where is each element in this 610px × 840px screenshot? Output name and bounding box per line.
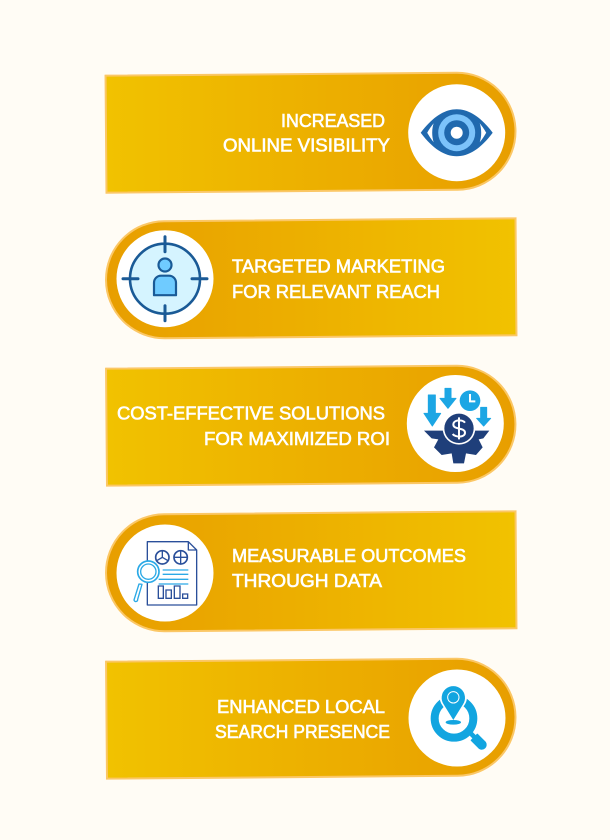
- icon circle 2: [116, 230, 214, 327]
- text: increased online visibility: INCREASED: [281, 111, 385, 131]
- icon: report with magnifier: [134, 542, 197, 605]
- panel: increased online visibility: [106, 72, 516, 193]
- text: enhanced local search: [215, 697, 390, 742]
- text: targeted marketing: TARGETED MARKETING: [232, 256, 445, 276]
- icon circle 4: [116, 524, 214, 622]
- panel: targeted marketing: [106, 218, 516, 339]
- icon: location magnifier: [435, 683, 486, 749]
- text: cost-effective solutions: COST-EFFECTIVE SOLUTIONS: [117, 404, 385, 424]
- text: targeted marketing: FOR RELEVANT REACH: [232, 282, 440, 302]
- icon: eye: [421, 109, 493, 156]
- banner shape 3: [106, 365, 516, 486]
- text: cost-effective solutions: FOR MAXIMIZED ROI: [204, 429, 390, 449]
- text: enhanced local search: ENHANCED LOCAL: [217, 697, 385, 717]
- panel: cost-effective solutions: [106, 365, 516, 486]
- icon circle 1: [408, 84, 505, 181]
- banner shape 5: [106, 658, 516, 779]
- panel: measurable outcomes: [106, 511, 516, 632]
- icon circle 3: [407, 375, 504, 472]
- banner shape 1: [106, 72, 516, 193]
- icon: gear with dollar and arrows: [424, 388, 491, 463]
- banner shape 2: [106, 218, 516, 339]
- text: increased online visibility: ONLINE VISIBILITY: [223, 136, 390, 156]
- text: increased online visibility: [223, 111, 390, 156]
- text: measurable outcomes: THROUGH DATA: [232, 571, 382, 591]
- text: targeted marketing: [232, 256, 445, 302]
- text: measurable outcomes: [232, 546, 466, 591]
- icon circle 5: [408, 670, 506, 766]
- text: cost-effective solutions: [117, 404, 390, 449]
- text: enhanced local search: SEARCH PRESENCE: [215, 722, 390, 742]
- panel: enhanced local search: [106, 658, 516, 779]
- text: measurable outcomes: MEASURABLE OUTCOMES: [232, 546, 466, 566]
- icon: target person: [123, 237, 207, 321]
- banner shape 4: [106, 511, 516, 632]
